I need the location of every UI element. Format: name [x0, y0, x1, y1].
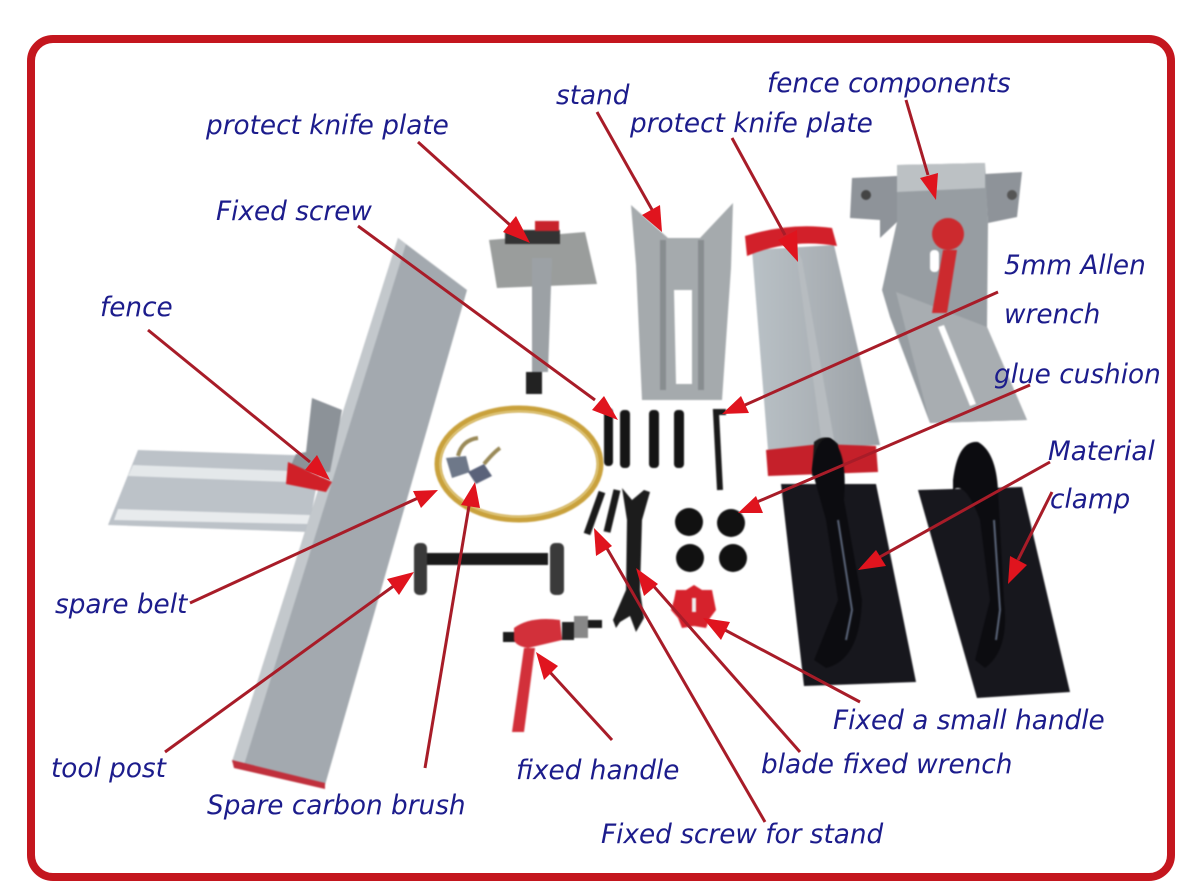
arrow: material clamp right — [1008, 492, 1052, 584]
label: stand: stand — [556, 81, 630, 111]
arrow: fence components — [906, 100, 938, 200]
arrow: blade fixed wrench — [636, 568, 800, 752]
arrow: protect knife plate left — [418, 142, 530, 243]
allen wrench part — [716, 412, 726, 490]
small handle knob part — [671, 585, 716, 628]
label: protect knife plate left: protect knife plate — [205, 111, 449, 141]
arrow: fence — [148, 330, 330, 480]
material clamp right part — [918, 442, 1070, 698]
arrow: fixed screw for stand — [594, 528, 765, 822]
fixed screws for stand part — [587, 490, 617, 534]
arrow: fixed a small handle — [703, 618, 860, 702]
label: fence: fence — [100, 293, 173, 323]
fixed handle part — [503, 616, 602, 732]
label: spare carbon brush: Spare carbon brush — [207, 791, 466, 821]
arrow: tool post — [165, 572, 414, 752]
arrow: material clamp left — [858, 462, 1050, 570]
label: fixed screw for stand: Fixed screw for stand — [601, 820, 884, 850]
label: 5mm Allen: 5mm Allen — [1004, 251, 1146, 281]
arrow: 5mm Allen wrench — [722, 292, 998, 414]
label: Material: Material — [1048, 437, 1156, 467]
protect knife plate (right) part — [745, 226, 880, 476]
fence part — [108, 238, 467, 789]
blade fixed wrench part — [613, 488, 650, 632]
spare belt part — [438, 409, 600, 519]
label: protect knife plate right: protect knife plate — [629, 109, 873, 139]
label: tool post: tool post — [51, 754, 168, 784]
arrow: stand — [597, 112, 662, 232]
label: spare belt: spare belt — [55, 590, 189, 620]
arrow: spare carbon brush — [425, 482, 480, 768]
fixed screws part — [604, 408, 684, 468]
arrow: glue cushion — [738, 385, 1030, 513]
label: wrench: wrench — [1004, 300, 1100, 330]
arrow: fixed screw — [358, 226, 618, 420]
label: fence components: fence components — [767, 69, 1011, 99]
label: clamp: clamp — [1050, 485, 1130, 515]
arrow: fixed handle — [536, 652, 612, 740]
protect knife plate (left) part — [489, 221, 597, 394]
stand part — [631, 203, 733, 400]
label: fixed screw: Fixed screw — [216, 197, 372, 227]
tool post part — [414, 543, 564, 595]
label: Fixed a small handle: Fixed a small handle — [833, 706, 1105, 736]
fence components part — [850, 163, 1027, 423]
arrow: protect knife plate right — [732, 138, 798, 262]
label: blade fixed wrench: blade fixed wrench — [761, 750, 1012, 780]
label: glue cushion: glue cushion — [994, 360, 1161, 390]
material clamp left part — [781, 438, 916, 686]
arrow: spare belt — [190, 490, 438, 603]
label: fixed handle: fixed handle — [516, 756, 679, 786]
carbon brushes part — [446, 438, 500, 484]
glue cushions part — [675, 508, 747, 572]
